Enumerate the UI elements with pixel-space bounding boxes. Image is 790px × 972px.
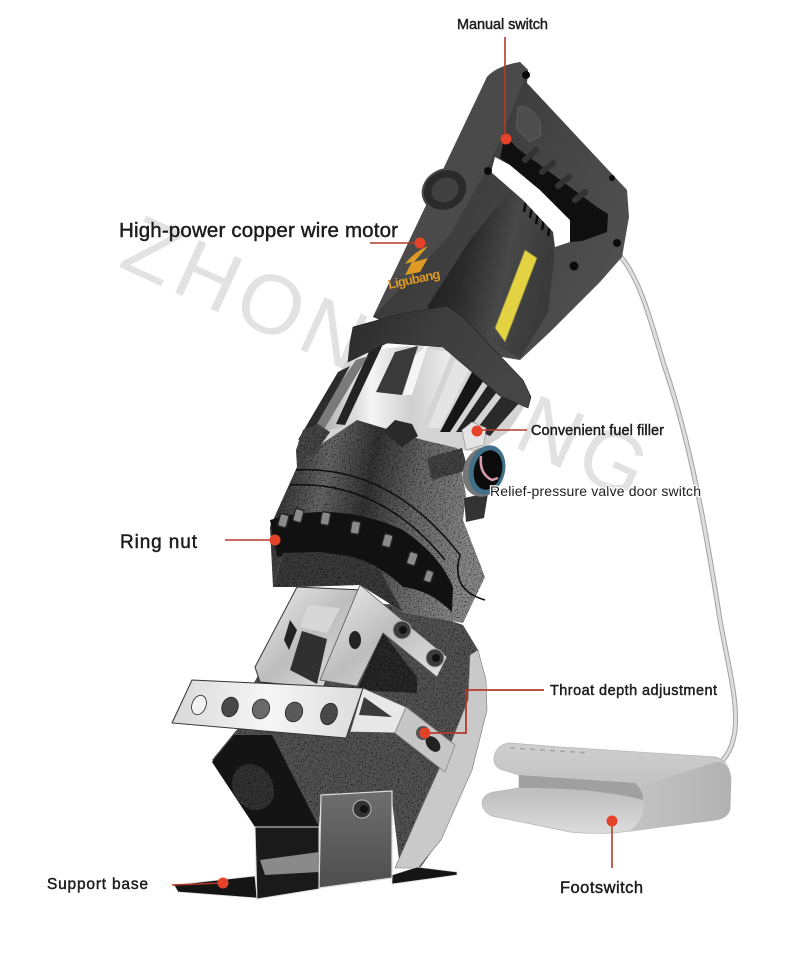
callout: footswitch: Footswitch — [560, 879, 643, 897]
finned glass section — [297, 342, 527, 452]
top collar — [348, 306, 531, 408]
black side face — [212, 735, 319, 827]
callout: relief valve: Relief-pressure valve door switch — [490, 483, 701, 499]
lower nub — [464, 493, 488, 522]
switch trigger — [516, 107, 541, 142]
callout: ring nut — [120, 532, 280, 553]
inner silver frame — [255, 587, 362, 688]
callout: fuel filler — [472, 423, 664, 439]
callout: throat depth: Throat depth adjustment — [550, 683, 717, 699]
callout: ring nut: Ring nut — [120, 532, 198, 553]
callout: footswitch — [560, 816, 643, 897]
front plate — [319, 791, 392, 888]
watermark: ZHONGQING — [110, 197, 663, 517]
callout: support base — [47, 876, 228, 893]
throat frame — [212, 600, 487, 868]
round button — [415, 161, 475, 219]
grip ridges — [525, 150, 585, 200]
side bore — [224, 756, 282, 818]
perforated strip — [172, 680, 455, 772]
brand logo: Ligubang — [387, 266, 442, 292]
motor panel — [427, 187, 554, 358]
lower hub — [273, 552, 403, 612]
callout: motor: High-power copper wire motor — [119, 219, 398, 242]
light edge — [395, 650, 487, 868]
flange seam — [290, 470, 485, 600]
callout: manual switch — [457, 17, 548, 144]
fuel filler cap — [462, 422, 486, 450]
black grip — [500, 135, 608, 242]
footswitch — [482, 743, 731, 833]
power cord — [621, 257, 736, 760]
recess — [519, 775, 643, 800]
callout: support base: Support base — [47, 876, 148, 893]
vent slits — [524, 201, 550, 236]
relief valve — [427, 422, 511, 522]
ring bolts — [277, 508, 434, 583]
support base — [174, 791, 457, 899]
cast hydraulic block — [270, 420, 485, 623]
L bracket — [320, 585, 447, 686]
callout: manual switch: Manual switch — [457, 17, 548, 33]
callout: throat depth — [420, 683, 717, 738]
motor handle and body — [373, 62, 629, 360]
dark notch — [357, 633, 417, 693]
screws — [484, 71, 621, 270]
piston — [300, 605, 340, 633]
side face — [628, 762, 731, 832]
bolt band — [270, 512, 453, 612]
callout: fuel filler: Convenient fuel filler — [531, 423, 664, 439]
handle top edge — [373, 62, 528, 317]
handle slot — [491, 157, 570, 247]
fin caps — [296, 424, 330, 458]
brand logo — [387, 246, 442, 292]
yellow label — [495, 250, 537, 342]
